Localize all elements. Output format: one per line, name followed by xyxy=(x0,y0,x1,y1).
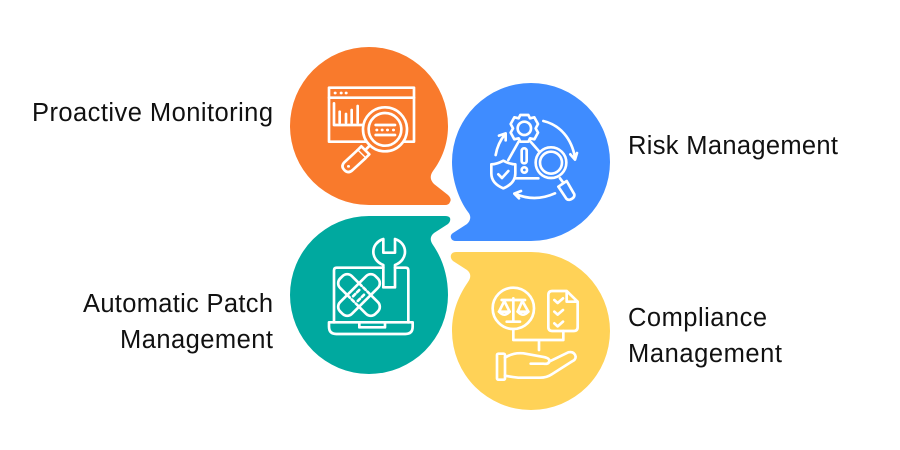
icon: laptop with bandage and wrench xyxy=(329,239,413,334)
bubble: orange xyxy=(290,47,451,205)
label: Risk Management: Risk Management xyxy=(628,132,838,160)
icon: compliance scales document hand xyxy=(493,288,578,380)
label: Compliance Management: Compliance xyxy=(628,304,767,332)
bubble: blue xyxy=(451,83,610,241)
label: Automatic Patch Management: Management xyxy=(120,326,273,354)
label: Compliance Management: Management xyxy=(628,340,782,368)
bubble: yellow xyxy=(451,252,610,410)
icon: risk gear shield magnifier xyxy=(491,115,577,200)
label: Compliance Management xyxy=(628,304,782,368)
icon: monitoring window with magnifier xyxy=(329,88,414,172)
label: Proactive Monitoring: Proactive Monitoring xyxy=(32,99,273,127)
label: Automatic Patch Management: Automatic Patch xyxy=(83,290,273,318)
bubble: teal xyxy=(290,216,450,374)
label: Automatic Patch Management xyxy=(83,290,273,354)
